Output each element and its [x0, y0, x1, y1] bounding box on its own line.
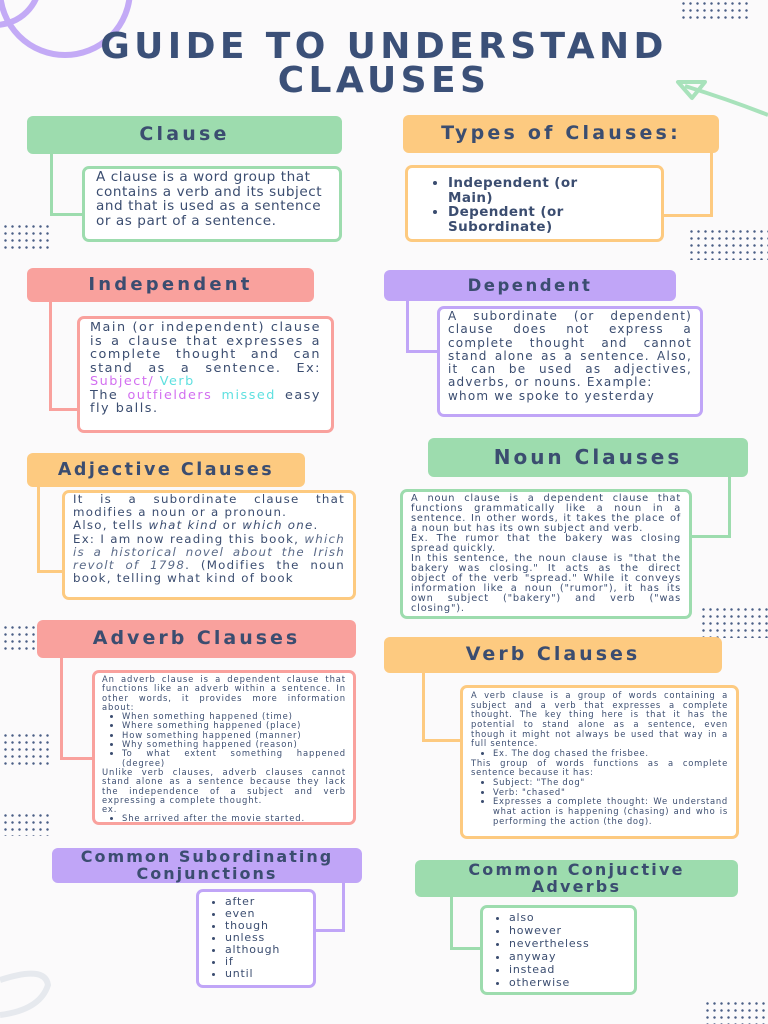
heading: dependent: Dependent [468, 276, 592, 295]
list: adverbs: anyway [509, 950, 556, 963]
list: conjunctions: although [225, 943, 280, 956]
heading: conjunctive: Common Conjuctive [468, 860, 685, 879]
heading: types [403, 115, 719, 153]
list: types: Independent (or Main) [448, 175, 578, 206]
heading: noun [428, 438, 748, 477]
heading: conjunctive: Adverbs [532, 876, 621, 896]
panel: types of clauses [403, 115, 719, 242]
text: verb definition [460, 685, 739, 839]
text: noun definition: Ex. The rumor that the bakery was closing spread quickly. [411, 533, 681, 554]
heading: adjective [27, 453, 305, 487]
list: adverbs: nevertheless [509, 937, 589, 950]
text: noun definition: In this sentence, the noun clause is "that the bakery was closing." It acts as the direct object of the verb "spread." While it conveys information like a noun ("rumor"), it has its own subject ("bakery") and verb ("was closing"). [411, 553, 681, 614]
title: GUIDE TO UNDERSTAND [100, 26, 668, 67]
text: independent definition: Main (or independent) clause is a clause that expresses a complete thought and can stand as a sentence. Ex: Subject/ Verb [90, 320, 321, 389]
text: dependent definition: whom we spoke to yesterday [448, 389, 655, 403]
decoration: green arrow [676, 80, 768, 117]
text: adjective definition [62, 490, 356, 600]
list: adverbs: however [509, 924, 562, 937]
heading: subordinating: Conjunctions [137, 864, 277, 882]
heading: independent: Independent [88, 274, 253, 295]
panel: noun clauses [400, 438, 748, 619]
list: adverbs: otherwise [509, 976, 570, 989]
heading: clause: Clause [139, 123, 230, 145]
heading: adjective: Adjective Clauses [58, 460, 274, 480]
heading: verb [384, 637, 722, 673]
text: clause definition [82, 166, 342, 242]
text: independent definition: The outfielders missed easy fly balls. [90, 388, 321, 416]
list: conjunctions: if [225, 955, 234, 968]
heading: independent [27, 268, 314, 302]
heading: clause [27, 116, 342, 154]
heading: adverb [37, 620, 356, 658]
text: adverb definition: To what extent something happened (degree) [122, 748, 346, 768]
text: adjective definition: Also, tells what kind or which one. [73, 518, 319, 532]
list: types [405, 165, 664, 242]
list: conjunctions [196, 889, 316, 988]
panel: verb clauses [384, 637, 739, 839]
text: verb definition: Ex. The dog chased the frisbee. [493, 748, 649, 758]
list: adverbs: also [509, 911, 534, 924]
title: CLAUSES [278, 60, 490, 101]
heading: adverb: Adverb Clauses [93, 627, 300, 649]
text: adverb definition: Where something happened (place) [122, 720, 301, 730]
text: dependent definition [437, 306, 703, 417]
list: conjunctions: after [225, 895, 255, 908]
list: types: Dependent (or Subordinate) [448, 204, 564, 234]
text: adverb definition: An adverb clause is a dependent clause that functions like an adverb within a sentence. In other words, it provides more information about: Unlike verb clauses, adverb clauses cannot stand alone as a sentence because they lack the independence of a subject and verb expressing a complete thought. [102, 674, 346, 805]
text: adjective definition: Ex: I am now reading this book, which is a historical novel about the Irish revolt of 1798. (Modifies the noun book, telling what kind of book [73, 532, 345, 585]
heading: types: Types of Clauses: [441, 122, 681, 144]
text: adverb definition: Why something happened (reason) [122, 739, 298, 749]
panel: dependent [384, 270, 703, 417]
text: adverb definition: When something happened (time) [122, 711, 293, 721]
heading: noun: Noun Clauses [494, 445, 682, 469]
heading: subordinating: Common Subordinating [81, 847, 333, 866]
list: adverbs [480, 905, 637, 995]
panel: adjective clauses [27, 453, 356, 600]
text: adverb definition: She arrived after the movie started. [122, 813, 305, 823]
title [100, 26, 668, 101]
list: conjunctions: even [225, 907, 255, 920]
text: noun definition: A noun clause is a dependent clause that functions grammatically like a noun in a sentence. In other words, it takes the place of a noun but has its own subject and verb. [411, 493, 681, 534]
list: conjunctions: though [225, 919, 269, 932]
text: dependent definition: A subordinate (or dependent) clause does not express a complete thought and cannot stand alone as a sentence. Also, it can be used as adjectives, adverbs, or nouns. Example: [448, 309, 692, 389]
text: adjective definition: It is a subordinate clause that modifies a noun or a pronoun. [73, 492, 345, 519]
text: adverb definition: How something happened (manner) [122, 730, 302, 740]
text: clause definition: A clause is a word group that contains a verb and its subject and that is used as a sentence or as part of a sentence. [96, 169, 322, 229]
text: verb definition: Subject: "The dog" [493, 777, 585, 787]
decoration: purple circle [0, 0, 132, 58]
text: verb definition: A verb clause is a group of words containing a subject and a verb that expresses a complete thought. The key thing here is that it has the potential to stand alone as a sentence, even though it might not always be used that way in a full sentence. This group of words functions as a complete sentence because it has: [471, 690, 728, 777]
heading: verb: Verb Clauses [466, 643, 640, 665]
panel: adverb clauses [37, 620, 356, 825]
list: conjunctions: unless [225, 931, 265, 944]
list: conjunctions: until [225, 967, 253, 980]
text: independent definition [77, 316, 334, 433]
panel: clause [27, 116, 342, 242]
heading: subordinating [52, 848, 362, 883]
decoration: grey swirl [0, 970, 51, 1018]
heading: dependent [384, 270, 676, 301]
panel: conjunctive adverbs [415, 860, 738, 995]
text: verb definition: Expresses a complete thought: We understand what action is happening (chasing) and who is performing the action (the dog). [493, 796, 728, 826]
text: noun definition [400, 489, 692, 619]
panel: subordinating conjunctions [52, 847, 362, 988]
text: adverb definition: ex. [102, 804, 117, 814]
text: verb definition: Verb: "chased" [493, 787, 566, 797]
panel: independent [27, 268, 334, 433]
heading: conjunctive [415, 860, 738, 897]
list: adverbs: instead [509, 963, 555, 976]
